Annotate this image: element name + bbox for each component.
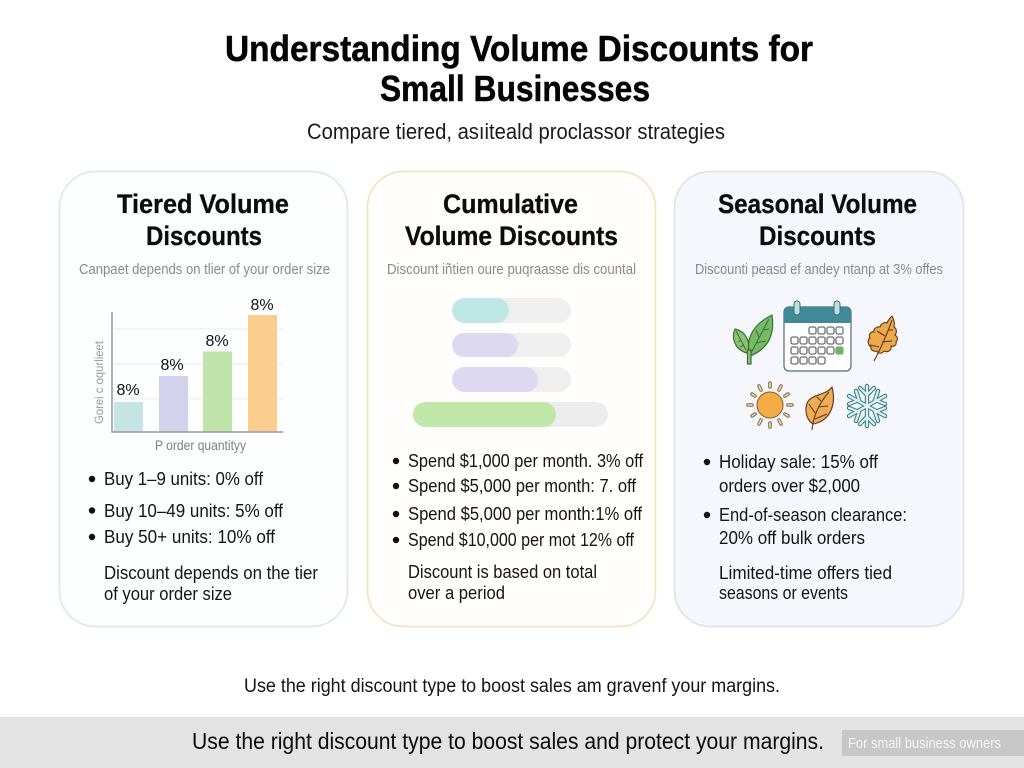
bar chart: order quantity: 8% (116, 382, 140, 399)
note: cumulative: over a period (408, 583, 505, 603)
bullet list: cumulative: Spend $5,000 per month: 7. off (408, 476, 637, 496)
icon: orange leaf (806, 387, 833, 430)
bullet list: seasonal: End-of-season clearance: (719, 505, 907, 525)
progress bars: spend tiers (413, 298, 608, 427)
heading: tiered: Tiered Volume (117, 189, 289, 219)
bullet list: seasonal (704, 452, 907, 548)
heading: cumulative: Volume Discounts (405, 221, 618, 251)
bullet list: seasonal: orders over $2,000 (719, 476, 860, 496)
bar chart: order quantity: 8% (160, 357, 184, 374)
heading: cumulative (405, 189, 618, 251)
note: tiered (104, 563, 318, 604)
bar chart: order quantity: 8% (250, 297, 274, 314)
footer band (0, 717, 1024, 768)
panel subtitle: tiered: Canpaet depends on tlier of your order size (79, 261, 330, 278)
bullet list: seasonal: Holiday sale: 15% off (719, 452, 879, 472)
heading: cumulative: Cumulative (443, 189, 578, 219)
heading: tiered: Discounts (146, 221, 262, 251)
heading: seasonal (718, 189, 917, 251)
note: cumulative (408, 562, 597, 603)
panel subtitle: cumulative: Discount iñtien oure puqraasse dis countal (387, 261, 636, 278)
bullet list: tiered: Buy 10–49 units: 5% off (104, 501, 284, 521)
bullet list: cumulative (393, 451, 644, 550)
badge: audience (842, 730, 1024, 756)
bullet list: tiered (89, 469, 284, 547)
bullet list: cumulative: Spend $10,000 per mot 12% off (408, 530, 635, 550)
panel subtitle: seasonal: Discounti peasd ef andey ntanp at 3% offes (695, 261, 943, 278)
heading: tiered (117, 189, 289, 251)
bar chart: order quantity: P order quantityy (155, 437, 246, 453)
panel: tiered volume discounts (60, 172, 348, 626)
bullet list: cumulative: Spend $1,000 per month. 3% off (408, 451, 644, 471)
bullet list: tiered: Buy 1–9 units: 0% off (104, 469, 264, 489)
title (225, 28, 813, 109)
panel: seasonal volume discounts (674, 172, 964, 626)
bullet list: seasonal: 20% off bulk orders (719, 528, 865, 548)
panel: cumulative volume discounts (368, 172, 656, 626)
footer message: Use the right discount type to boost sales and protect your margins. (192, 728, 824, 754)
badge: audience: For small business owners (848, 735, 1001, 752)
takeaway sentence: Use the right discount type to boost sales am gravenf your margins. (244, 676, 780, 697)
icon: autumn oak leaf (868, 316, 897, 361)
note: tiered: of your order size (104, 584, 232, 604)
icon: snowflake (849, 386, 885, 426)
subtitle: Compare tiered, asıiteald proclassor strategies (307, 119, 725, 144)
note: seasonal: seasons or events (719, 583, 848, 603)
title: Understanding Volume Discounts for (225, 28, 813, 69)
bullet list: tiered: Buy 50+ units: 10% off (104, 527, 276, 547)
note: cumulative: Discount is based on total (408, 562, 597, 582)
note: tiered: Discount depends on the tier (104, 563, 318, 583)
bar chart: order quantity (92, 297, 283, 453)
icon: calendar (784, 301, 851, 371)
title: Small Businesses (380, 68, 650, 109)
heading: seasonal: Seasonal Volume (718, 189, 917, 219)
heading: seasonal: Discounts (759, 221, 876, 251)
note: seasonal: Limited-time offers tied (719, 563, 892, 583)
bar chart: order quantity: Gorei c oqurlieet (92, 340, 106, 424)
bullet list: cumulative: Spend $5,000 per month:1% off (408, 504, 643, 524)
bar chart: order quantity: 8% (205, 333, 229, 350)
note: seasonal (719, 563, 892, 603)
icon: sun (748, 383, 792, 427)
icon: green leaves (734, 315, 773, 364)
